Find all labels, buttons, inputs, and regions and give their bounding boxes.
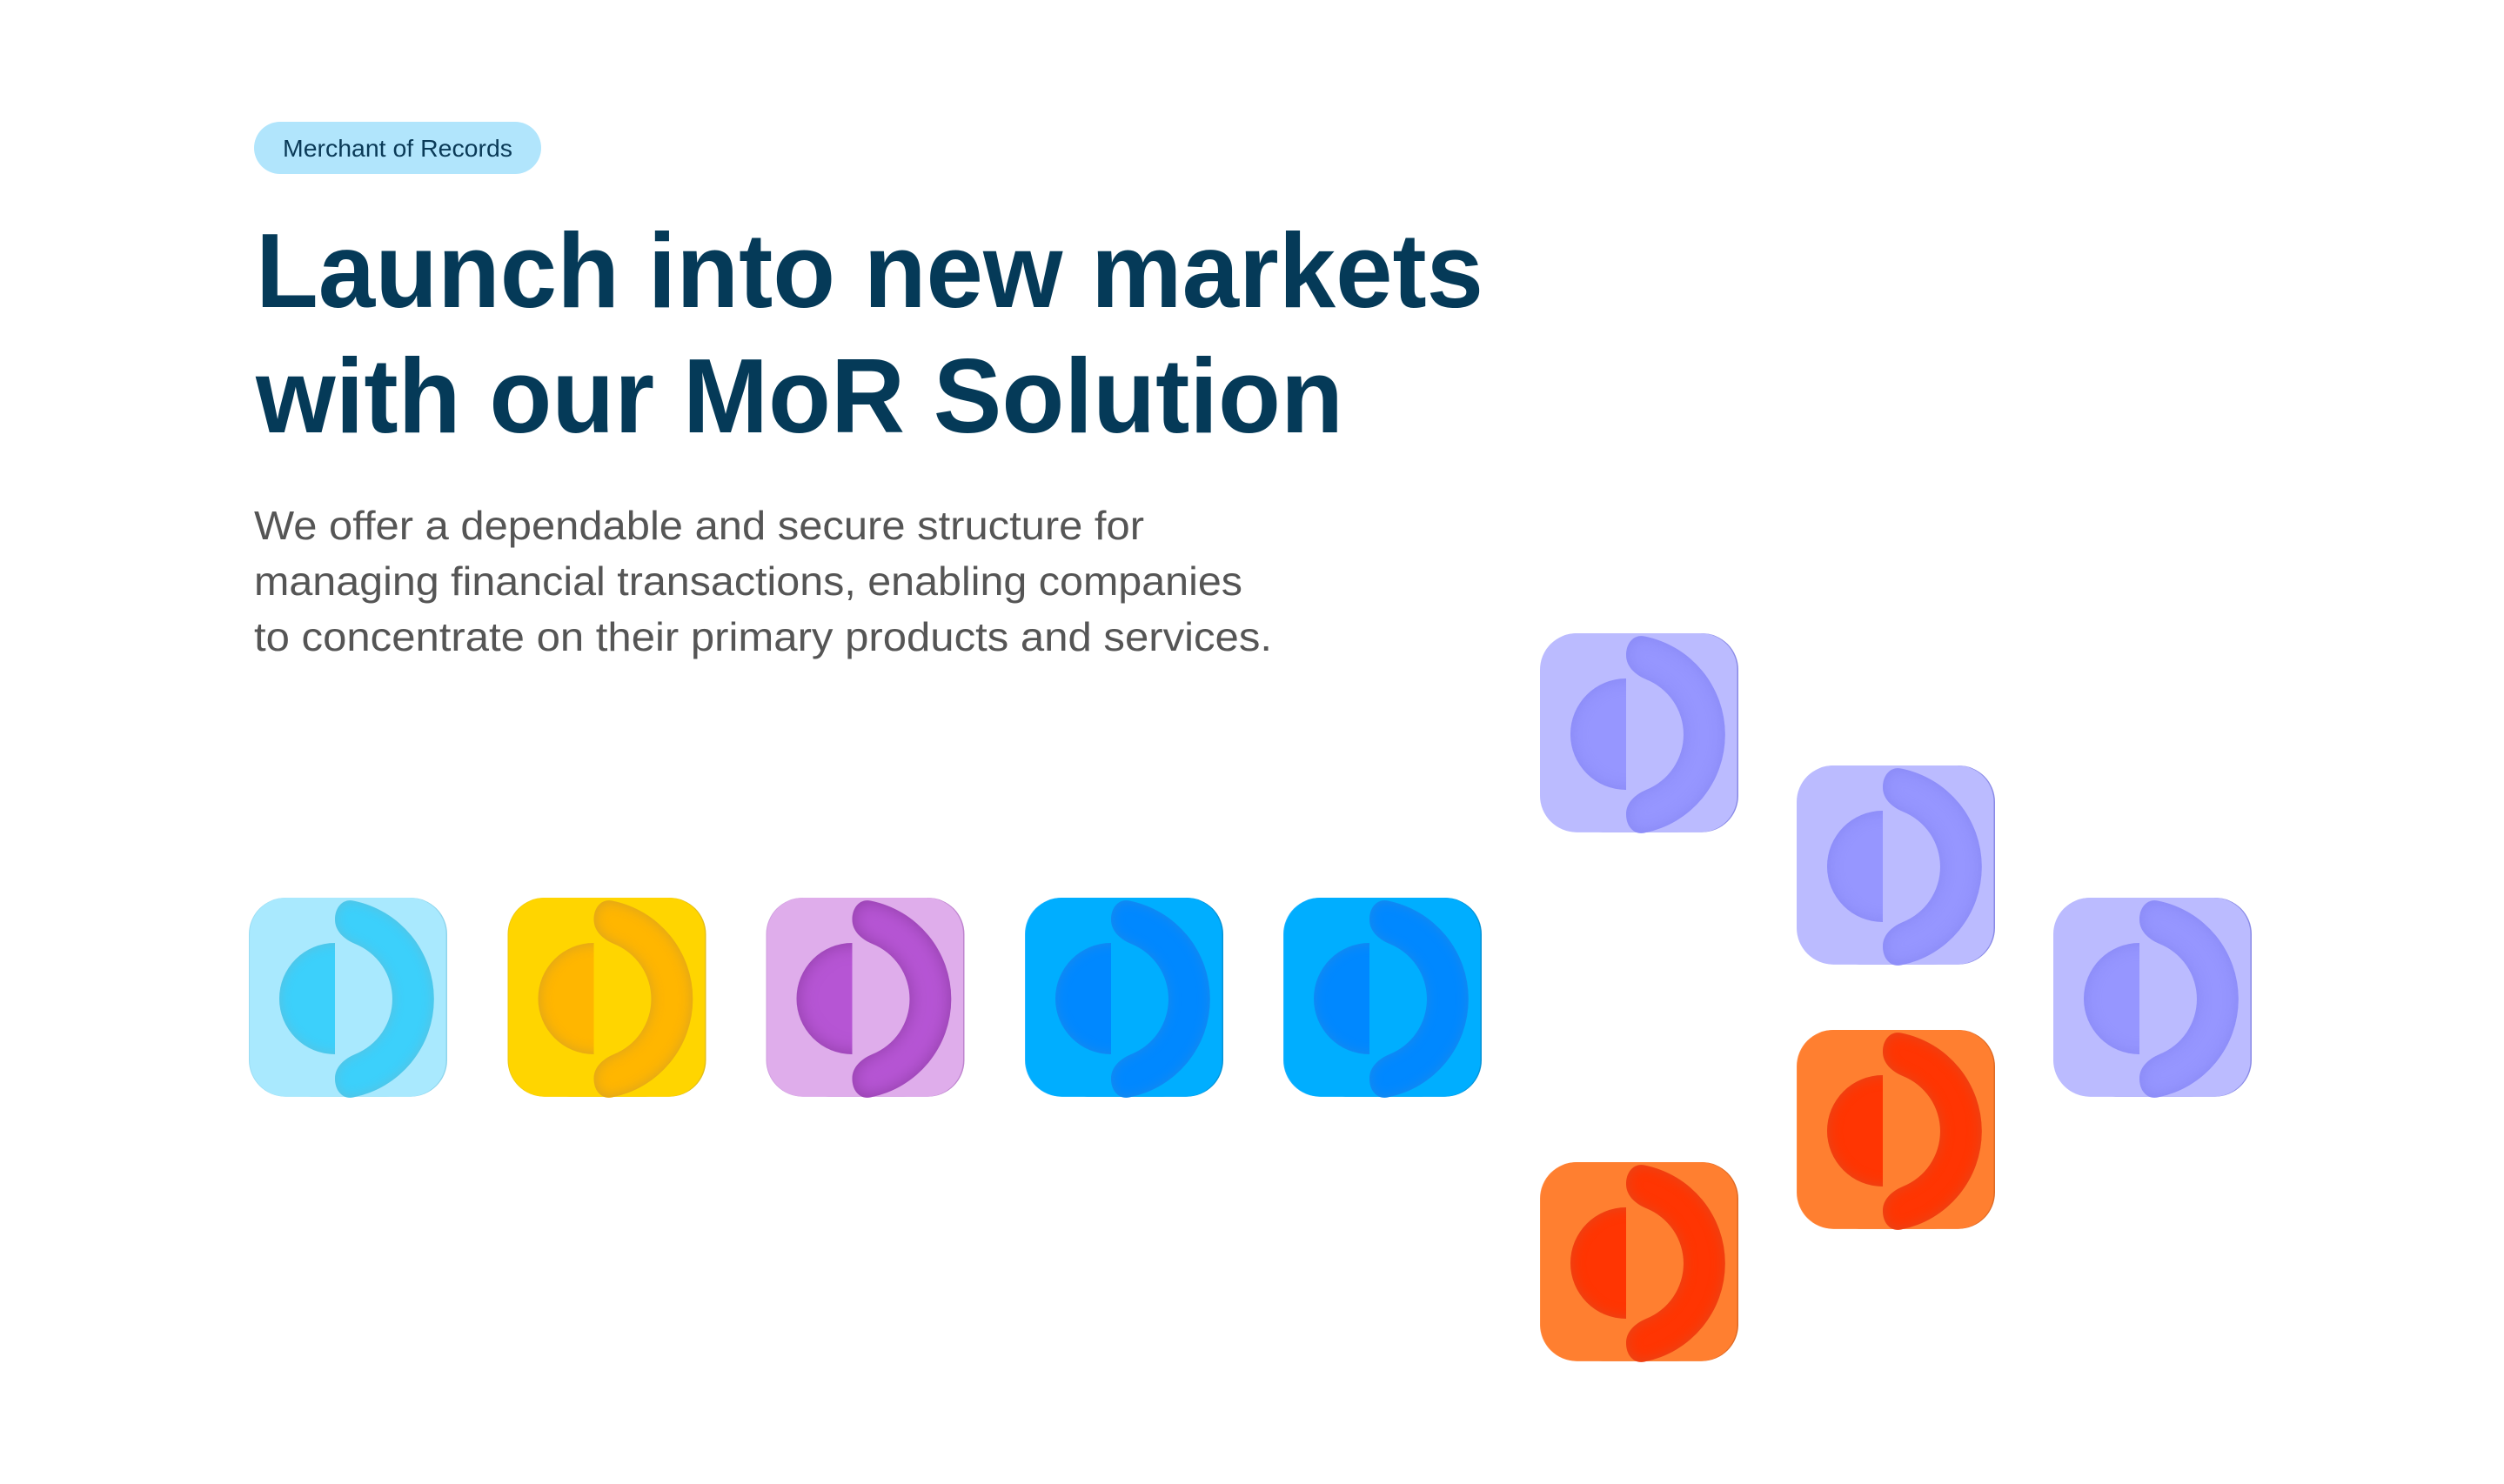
icon: blue logo tile two bbox=[1283, 898, 1482, 1098]
icon: yellow logo tile bbox=[508, 898, 706, 1098]
badge: Merchant of Records: Merchant of Records bbox=[283, 135, 512, 162]
badge: Merchant of Records bbox=[254, 122, 541, 174]
icon: lavender logo tile top bbox=[1540, 633, 1738, 833]
description text: We offer a dependable and secure structure for bbox=[254, 503, 1144, 548]
icon: purple logo tile bbox=[766, 898, 964, 1098]
icon: orange logo tile middle bbox=[1797, 1030, 1995, 1230]
icon: orange logo tile bottom bbox=[1540, 1162, 1738, 1362]
description text: managing financial transactions, enabling companies bbox=[254, 558, 1242, 604]
icon: blue logo tile one bbox=[1025, 898, 1223, 1098]
description text: to concentrate on their primary products and services. bbox=[254, 614, 1272, 659]
icon: lavender logo tile middle bbox=[1797, 765, 1995, 966]
description text bbox=[254, 503, 1272, 659]
icon: light cyan logo tile bbox=[249, 898, 447, 1098]
title: Launch into new markets bbox=[256, 211, 1483, 330]
title bbox=[255, 211, 1483, 455]
icon: lavender logo tile right bbox=[2053, 898, 2252, 1098]
title: with our MoR Solution bbox=[255, 337, 1343, 455]
